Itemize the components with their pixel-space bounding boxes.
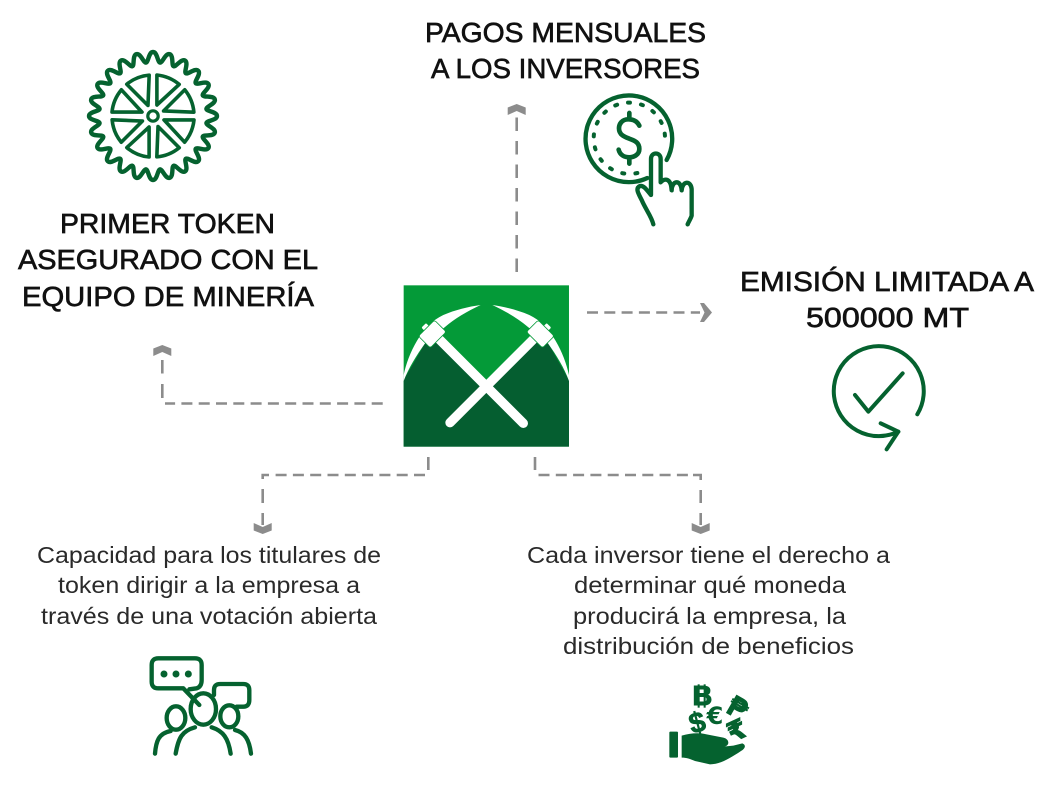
heading: emisión limitada: 500000 MT [806, 302, 969, 333]
text: capacidad: través de una votación abierta [41, 603, 377, 629]
central logo: crossed pickaxes [404, 285, 569, 447]
text: capacidad: token dirigir a la empresa a [58, 572, 360, 598]
arrow: down to capacidad [254, 457, 428, 534]
heading: pagos mensuales: A LOS INVERSORES [431, 53, 700, 84]
icon: hand with currencies: € [706, 702, 723, 730]
heading: pagos mensuales [425, 17, 706, 84]
heading: primer token: ASEGURADO CON EL [18, 244, 318, 275]
icon: coin with pointing hand [586, 95, 692, 224]
heading: primer token: PRIMER TOKEN [60, 208, 275, 239]
text: cada inversor: determinar qué moneda [574, 572, 846, 598]
arrow: up to pagos mensuales [508, 104, 526, 272]
text: cada inversor: distribución de beneficios [563, 633, 854, 659]
text: cada inversor: producirá la empresa, la [573, 603, 846, 629]
heading: pagos mensuales: PAGOS MENSUALES [425, 17, 706, 48]
text: cada inversor: Cada inversor tiene el derecho a [527, 542, 890, 568]
arrow: left to primer token [153, 345, 383, 404]
arrow: right to emisión limitada [587, 303, 712, 322]
icon: people talking [152, 658, 251, 754]
icon: hand with currencies [669, 680, 755, 764]
icon: check with circular arrow [834, 346, 924, 449]
text: cada inversor [527, 542, 890, 659]
icon: hand with currencies: $ [686, 706, 709, 741]
text: capacidad: Capacidad para los titulares de [37, 542, 381, 568]
arrow: down to cada inversor [535, 457, 710, 534]
heading: emisión limitada: EMISIÓN LIMITADA A [740, 266, 1034, 297]
icon: hand with currencies: ₹ [722, 713, 752, 749]
text: capacidad [37, 542, 381, 629]
icon: hand with currencies: ₱ [721, 689, 755, 728]
icon: hand with currencies: B [692, 680, 712, 711]
heading: primer token [18, 208, 318, 312]
heading: primer token: EQUIPO DE MINERÍA [22, 281, 314, 312]
icon: gear wheel [89, 52, 217, 180]
heading: emisión limitada [740, 266, 1034, 333]
